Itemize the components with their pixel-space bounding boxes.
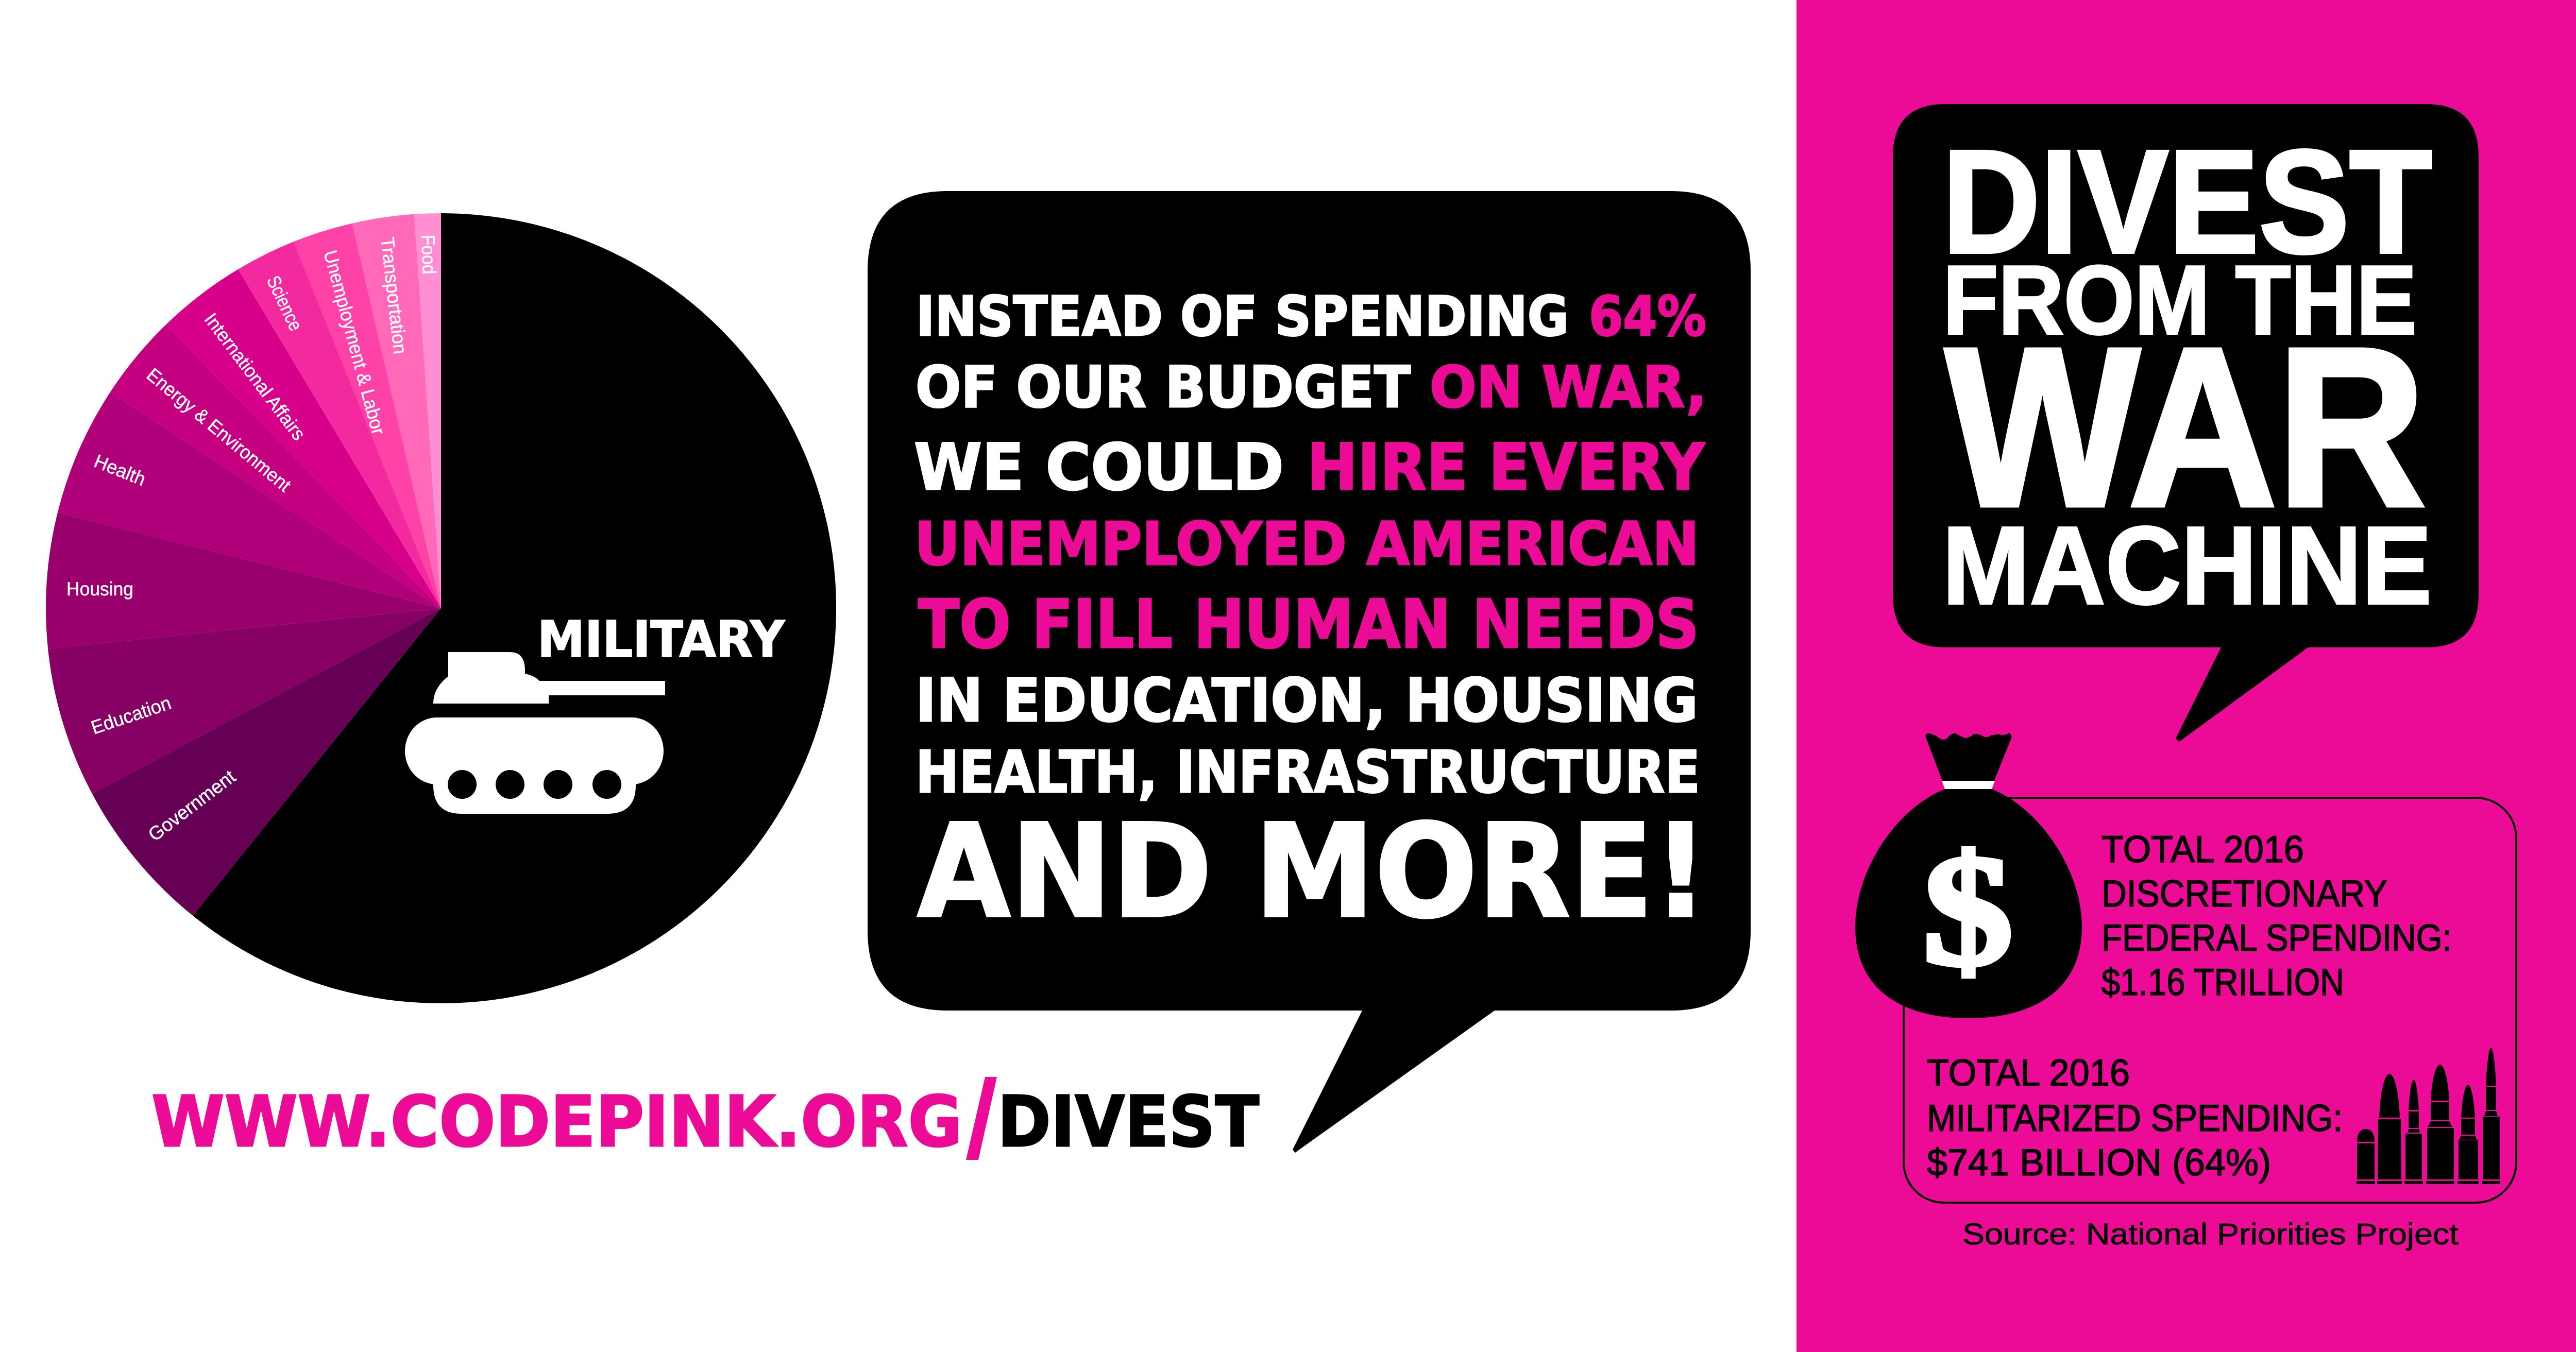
slice: housing	[46, 512, 441, 649]
slice: transportation	[352, 214, 441, 608]
text: total discretionary spending: FEDERAL SPENDING:	[2102, 917, 2452, 959]
icon: money bag	[1855, 733, 2082, 1018]
label: unemployment and labor: Unemployment & Labor	[319, 248, 389, 437]
slice: government	[92, 608, 441, 916]
pie chart: budget breakdown	[46, 213, 836, 1003]
icon: tank	[405, 652, 665, 814]
title text	[1942, 120, 2432, 627]
speech bubble: main message	[868, 191, 1751, 1153]
link: website url: WWW.CODEPINK.ORG	[151, 1082, 962, 1163]
text: total discretionary spending	[2102, 829, 2452, 1003]
title text: DIVEST	[1942, 120, 2432, 284]
message text: WE COULD	[914, 431, 1284, 505]
message text: HEALTH, INFRASTRUCTURE	[916, 739, 1700, 806]
panel: spending figures box	[1904, 798, 2516, 1203]
message text: HIRE EVERY	[1307, 431, 1705, 505]
title text: MACHINE	[1942, 503, 2432, 627]
text: total discretionary spending: DISCRETIONARY	[2102, 873, 2387, 915]
label: education: Education	[89, 692, 174, 739]
slice: international affairs	[166, 269, 441, 608]
text: source credit: Source: National Priorities Project	[1962, 1218, 2459, 1251]
text: total militarized spending	[1927, 1052, 2343, 1184]
panel: pink right column	[1797, 0, 2576, 1352]
message text: UNEMPLOYED AMERICAN	[914, 510, 1699, 579]
text: total discretionary spending: TOTAL 2016	[2102, 829, 2304, 870]
slice: education	[48, 608, 441, 794]
title text: WAR	[1945, 301, 2426, 554]
slice: food	[414, 213, 441, 608]
label: food: Food	[417, 234, 440, 275]
link: website url: DIVEST	[997, 1082, 1259, 1163]
speech bubble: title	[1893, 104, 2479, 742]
text: total militarized spending: $741 BILLION (64%)	[1927, 1142, 2271, 1184]
label: science: Science	[263, 272, 307, 334]
title text: FROM THE	[1943, 246, 2417, 355]
icon: bullets	[2357, 1048, 2500, 1184]
message text: TO FILL HUMAN NEEDS	[918, 585, 1699, 663]
message text: ON WAR,	[1430, 354, 1707, 421]
slice: military	[193, 213, 836, 1003]
label: international affairs: International Affairs	[200, 309, 310, 444]
slice: health	[58, 392, 441, 608]
message text	[914, 285, 1708, 947]
slice: unemployment and labor	[294, 224, 441, 608]
label: energy and environment: Energy & Environment	[143, 364, 295, 496]
icon: dollar sign: $	[1923, 823, 2013, 999]
text: total militarized spending: TOTAL 2016	[1927, 1052, 2130, 1094]
text: total militarized spending: MILITARIZED SPENDING:	[1927, 1098, 2343, 1139]
label: military: MILITARY	[537, 610, 786, 669]
message text: 64%	[1589, 285, 1706, 348]
message text: INSTEAD OF SPENDING	[916, 285, 1569, 348]
slice: energy and environment	[110, 324, 441, 608]
label: government: Government	[144, 766, 240, 845]
message text: OF OUR BUDGET	[916, 354, 1411, 421]
label: housing: Housing	[66, 578, 133, 600]
message text: AND MORE!	[917, 797, 1708, 947]
message text: IN EDUCATION, HOUSING	[916, 666, 1698, 735]
slice: science	[238, 242, 441, 608]
text: total discretionary spending: $1.16 TRILLION	[2102, 962, 2344, 1003]
label: transportation: Transportation	[377, 236, 411, 355]
label: health: Health	[91, 450, 149, 490]
